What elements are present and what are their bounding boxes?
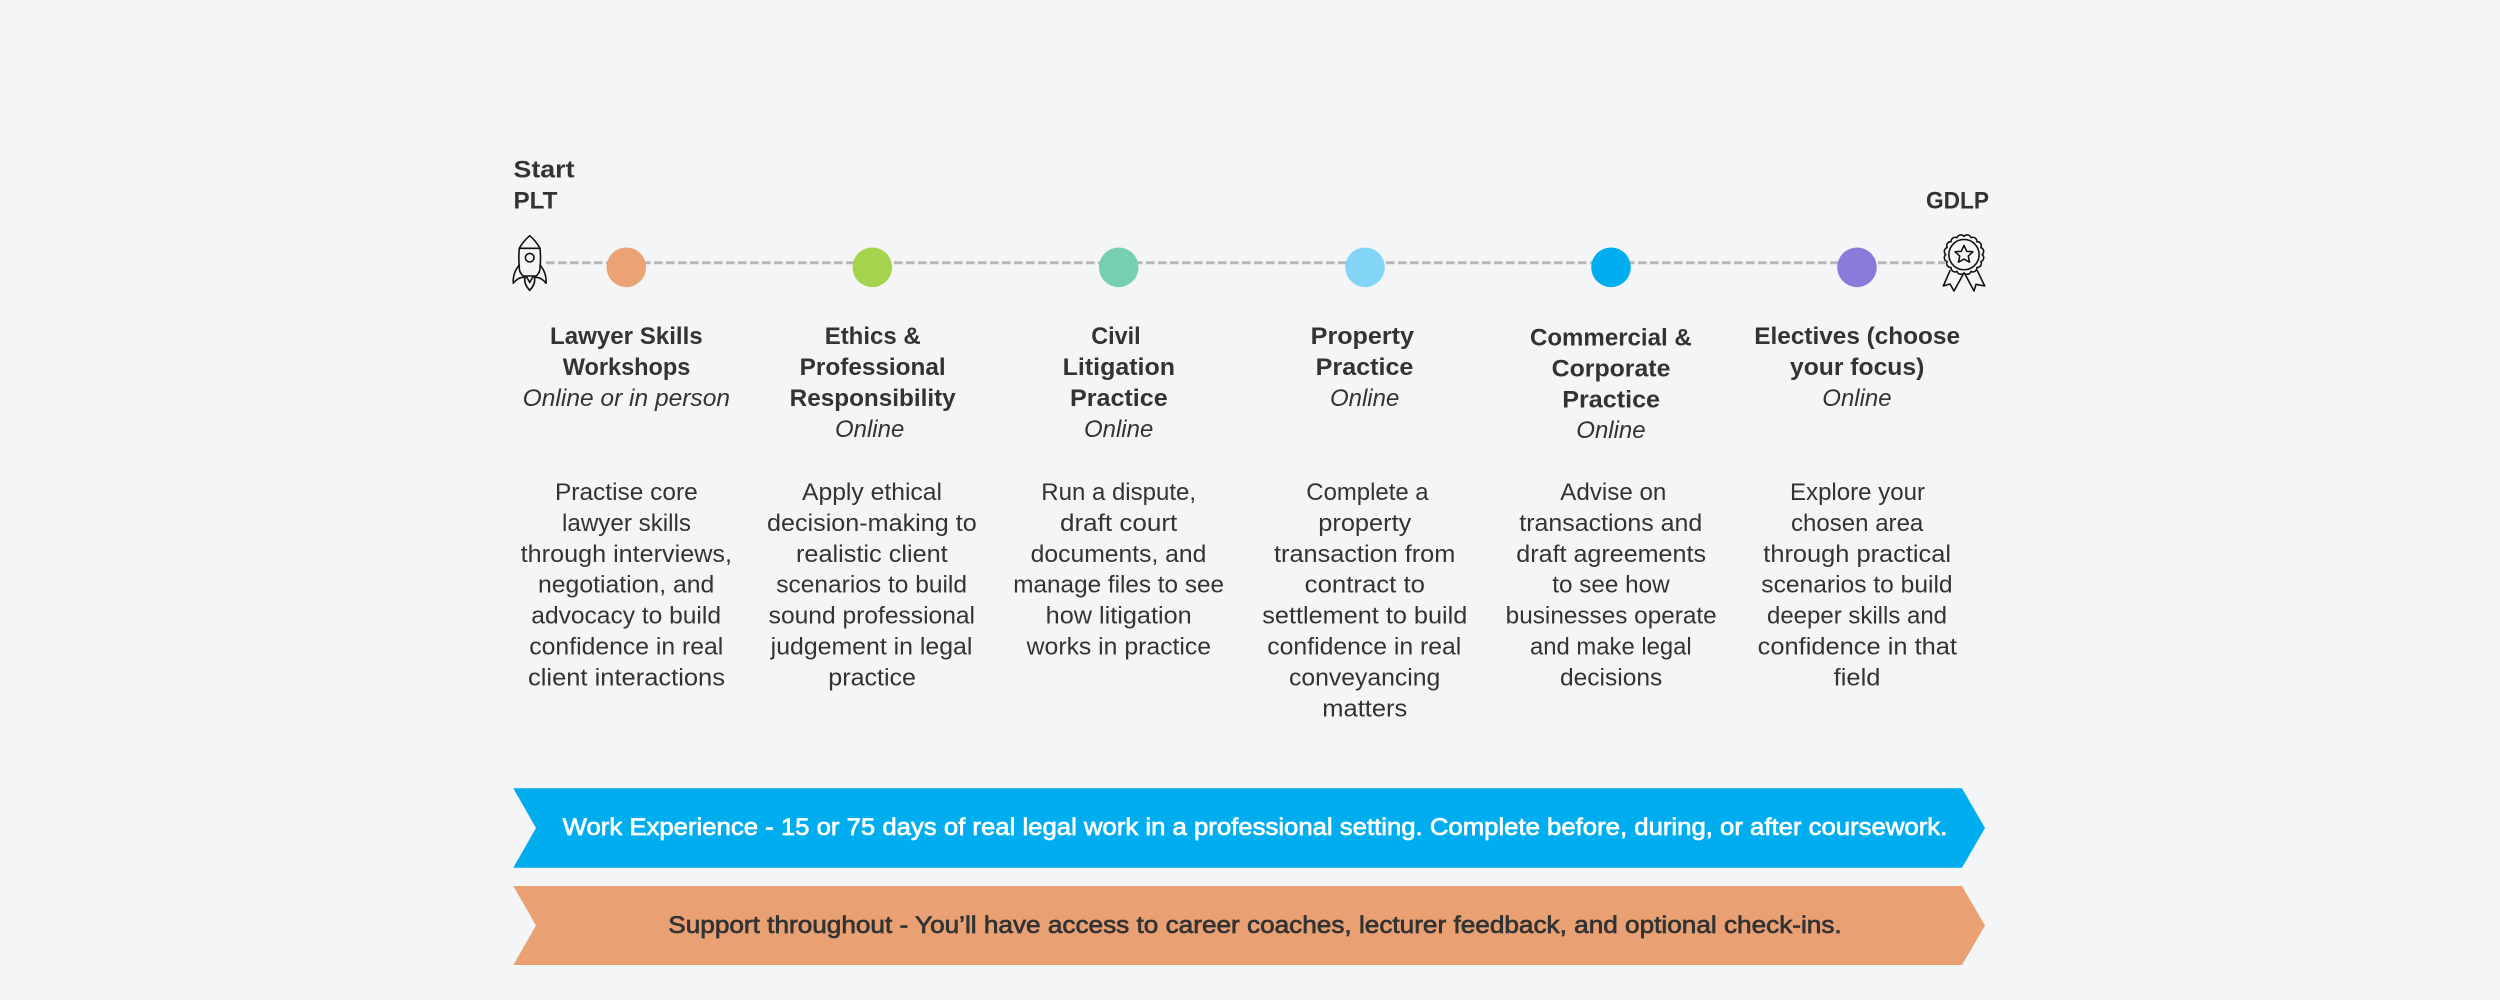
heading: Electives (choose your focus): your focus) (1790, 354, 1924, 381)
description: Apply ethical (802, 479, 942, 506)
description: manage files to see (1013, 572, 1224, 599)
heading: Ethics & Professional Responsibility: Ethics & (825, 323, 921, 350)
column: Civil Litigation Practice (1013, 323, 1224, 660)
description: contract to (1305, 572, 1425, 599)
description: draft agreements (1516, 541, 1706, 568)
column: Lawyer Skills Workshops (521, 323, 732, 691)
heading: Commercial & Corporate Practice: Commercial & (1530, 324, 1692, 352)
description (1262, 479, 1467, 722)
description (521, 479, 732, 691)
description: through interviews, (521, 541, 732, 568)
heading: Civil Litigation Practice (1063, 323, 1175, 412)
label: Start PLT (514, 156, 574, 214)
description: sound professional (769, 603, 975, 630)
delivery mode: Online (1822, 385, 1892, 412)
description (1013, 479, 1224, 660)
delivery mode: Online (835, 416, 904, 443)
description: practice (828, 664, 916, 691)
description: client interactions (528, 664, 725, 691)
heading: Electives (choose your focus) (1754, 323, 1960, 381)
description: field (1834, 664, 1880, 691)
heading: Civil Litigation Practice: Civil (1091, 323, 1141, 350)
description: judgement in legal (770, 634, 972, 660)
step marker 4 (1345, 247, 1385, 287)
description: Run a dispute, (1041, 479, 1196, 506)
description: Advise on (1560, 479, 1666, 506)
label: Start PLT: PLT (514, 188, 558, 214)
heading: Ethics & Professional Responsibility (790, 323, 956, 412)
icon: rocket (513, 236, 546, 290)
banner: work experience (513, 788, 1985, 868)
description: Complete a (1306, 479, 1429, 506)
delivery mode: Online or in person (523, 385, 730, 412)
description: draft court (1060, 510, 1178, 537)
heading: Ethics & Professional Responsibility: Professional (800, 354, 946, 381)
step marker 3 (1099, 247, 1138, 287)
description: decision-making to (767, 510, 977, 537)
heading: Electives (choose your focus): Electives (choose (1754, 323, 1960, 350)
description: chosen area (1791, 510, 1924, 537)
timeline dashed line (546, 261, 1945, 264)
description (1506, 479, 1717, 691)
label: GDLP: GDLP (1926, 188, 1989, 214)
description: property (1318, 510, 1411, 537)
description: confidence in that (1758, 634, 1957, 660)
description: confidence in real (1267, 634, 1461, 660)
icon: award badge (1943, 235, 1985, 291)
description: conveyancing (1289, 664, 1440, 691)
description: and make legal (1530, 634, 1692, 660)
description (1758, 479, 1957, 691)
delivery mode: Online (1084, 416, 1153, 443)
heading: Lawyer Skills Workshops (550, 323, 703, 381)
description: to see how (1552, 572, 1670, 599)
description: Practise core (555, 479, 698, 506)
heading: Civil Litigation Practice: Practice (1070, 385, 1168, 412)
step marker 1 (606, 247, 646, 287)
description: businesses operate (1506, 603, 1717, 630)
column: Electives (1754, 323, 1960, 691)
step marker 6 (1837, 247, 1877, 287)
heading: Commercial & Corporate Practice: Corporate (1552, 355, 1670, 382)
description: works in practice (1026, 634, 1211, 660)
description: realistic client (796, 541, 948, 568)
heading: Civil Litigation Practice: Litigation (1063, 354, 1175, 381)
label: Start PLT: Start (514, 156, 574, 184)
column: Ethics & Professional Responsibility (767, 323, 977, 691)
banner: support: Support throughout - You’ll have access to career coaches, lecturer feedback, and optional check-ins. (668, 912, 1842, 939)
description: decisions (1560, 664, 1662, 691)
description: lawyer skills (562, 510, 691, 537)
description: negotiation, and (538, 572, 714, 599)
column: Property Practice (1262, 323, 1467, 722)
description: scenarios to build (776, 572, 967, 599)
heading: Commercial & Corporate Practice (1530, 324, 1692, 413)
heading: Ethics & Professional Responsibility: Responsibility (790, 385, 956, 412)
description: transaction from (1274, 541, 1455, 568)
description: deeper skills and (1767, 603, 1947, 630)
banner: work experience: Work Experience - 15 or 75 days of real legal work in a professional setting. Complete before, during, or after coursework. (563, 814, 1947, 841)
delivery mode: Online (1576, 417, 1646, 444)
description: transactions and (1519, 510, 1702, 537)
delivery mode: Online (1330, 385, 1399, 412)
description: settlement to build (1262, 603, 1467, 630)
description: scenarios to build (1761, 572, 1953, 599)
heading: Property Practice (1311, 323, 1415, 381)
description: advocacy to build (531, 603, 721, 630)
heading: Lawyer Skills Workshops: Workshops (563, 354, 690, 381)
description: confidence in real (529, 634, 723, 660)
description: matters (1322, 695, 1407, 722)
description (767, 479, 977, 691)
banner: support (513, 886, 1985, 965)
description: documents, and (1031, 541, 1206, 568)
description: through practical (1763, 541, 1951, 568)
column: Commercial & Corporate Practice (1506, 324, 1717, 691)
description: Explore your (1790, 479, 1925, 506)
heading: Commercial & Corporate Practice: Practice (1562, 386, 1660, 413)
heading: Property Practice: Practice (1316, 354, 1413, 381)
step marker 2 (852, 247, 892, 287)
heading: Lawyer Skills Workshops: Lawyer Skills (550, 323, 703, 350)
step marker 5 (1591, 247, 1631, 287)
description: how litigation (1046, 603, 1192, 630)
heading: Property Practice: Property (1311, 323, 1415, 350)
